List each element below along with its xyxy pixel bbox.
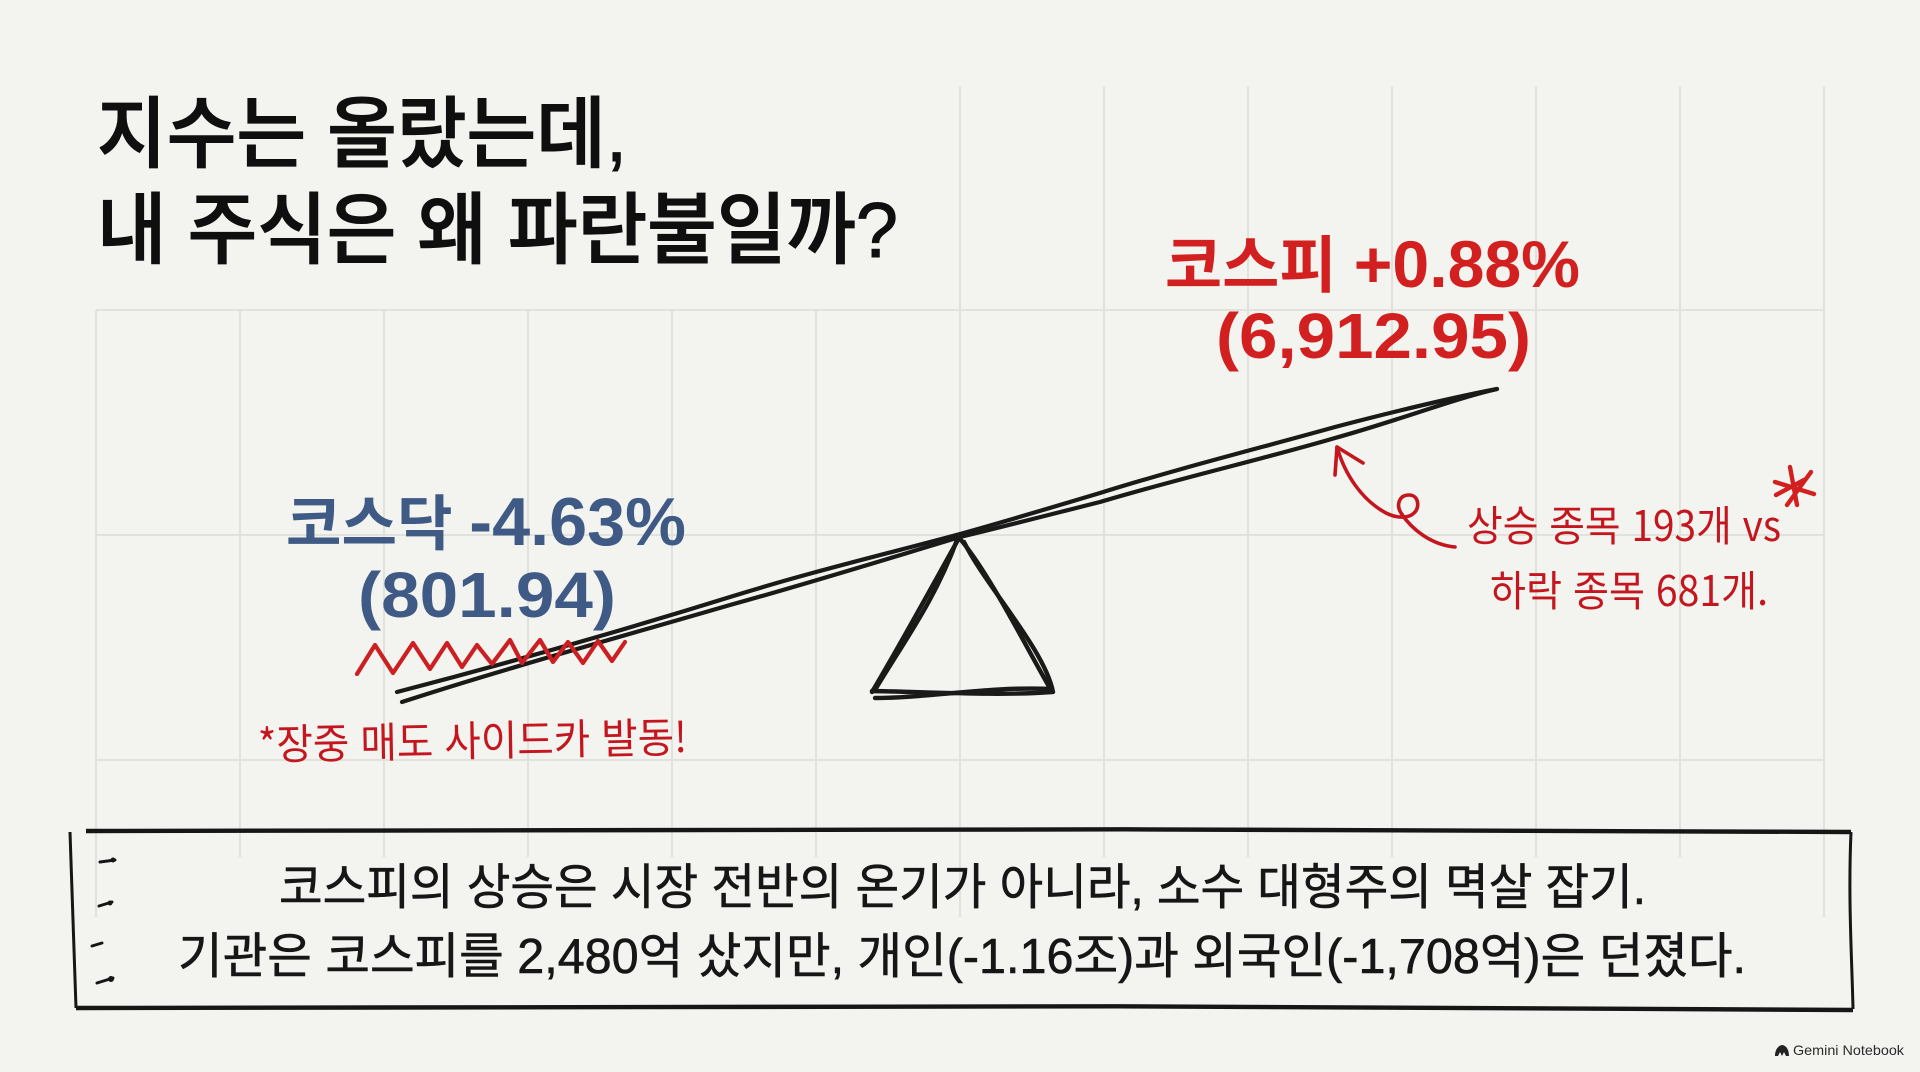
binding ticks xyxy=(92,858,116,983)
callout text xyxy=(178,861,1746,984)
red zigzag under KOSDAQ xyxy=(357,640,625,674)
callout text: 코스피의 상승은 시장 전반의 온기가 아니라, 소수 대형주의 멱살 잡기. xyxy=(279,861,1646,915)
handwritten note: advancers vs decliners: 하락 종목 681개. xyxy=(1490,558,1768,619)
handwritten note: advancers vs decliners: 상승 종목 193개 vs xyxy=(1467,493,1781,554)
handwritten note: advancers vs decliners xyxy=(1467,493,1781,619)
watermark text: Gemini Notebook xyxy=(1793,1042,1905,1058)
callout box xyxy=(70,829,1853,1010)
icon: gemini logo xyxy=(1775,1045,1789,1056)
KOSDAQ label xyxy=(286,484,686,631)
KOSDAQ label: (801.94) xyxy=(358,559,616,631)
red asterisk xyxy=(1775,467,1814,505)
background grid xyxy=(96,86,1824,917)
title: 지수는 올랐는데, xyxy=(97,90,627,178)
seesaw beam xyxy=(397,389,1497,702)
title: 내 주식은 왜 파란불일까? xyxy=(97,186,898,274)
KOSPI label: 코스피 +0.88% xyxy=(1165,227,1580,301)
KOSDAQ label: 코스닥 -4.63% xyxy=(286,484,686,560)
red curved arrow xyxy=(1335,447,1455,547)
KOSPI label: (6,912.95) xyxy=(1216,300,1531,372)
seesaw fulcrum triangle xyxy=(872,538,1053,698)
callout text: 기관은 코스피를 2,480억 샀지만, 개인(-1.16조)과 외국인(-1,708억)은 던졌다. xyxy=(178,930,1746,984)
watermark xyxy=(1775,1042,1905,1058)
title xyxy=(97,90,898,274)
handwritten note: sidecar: *장중 매도 사이드카 발동! xyxy=(257,704,687,773)
KOSPI label xyxy=(1165,227,1580,372)
